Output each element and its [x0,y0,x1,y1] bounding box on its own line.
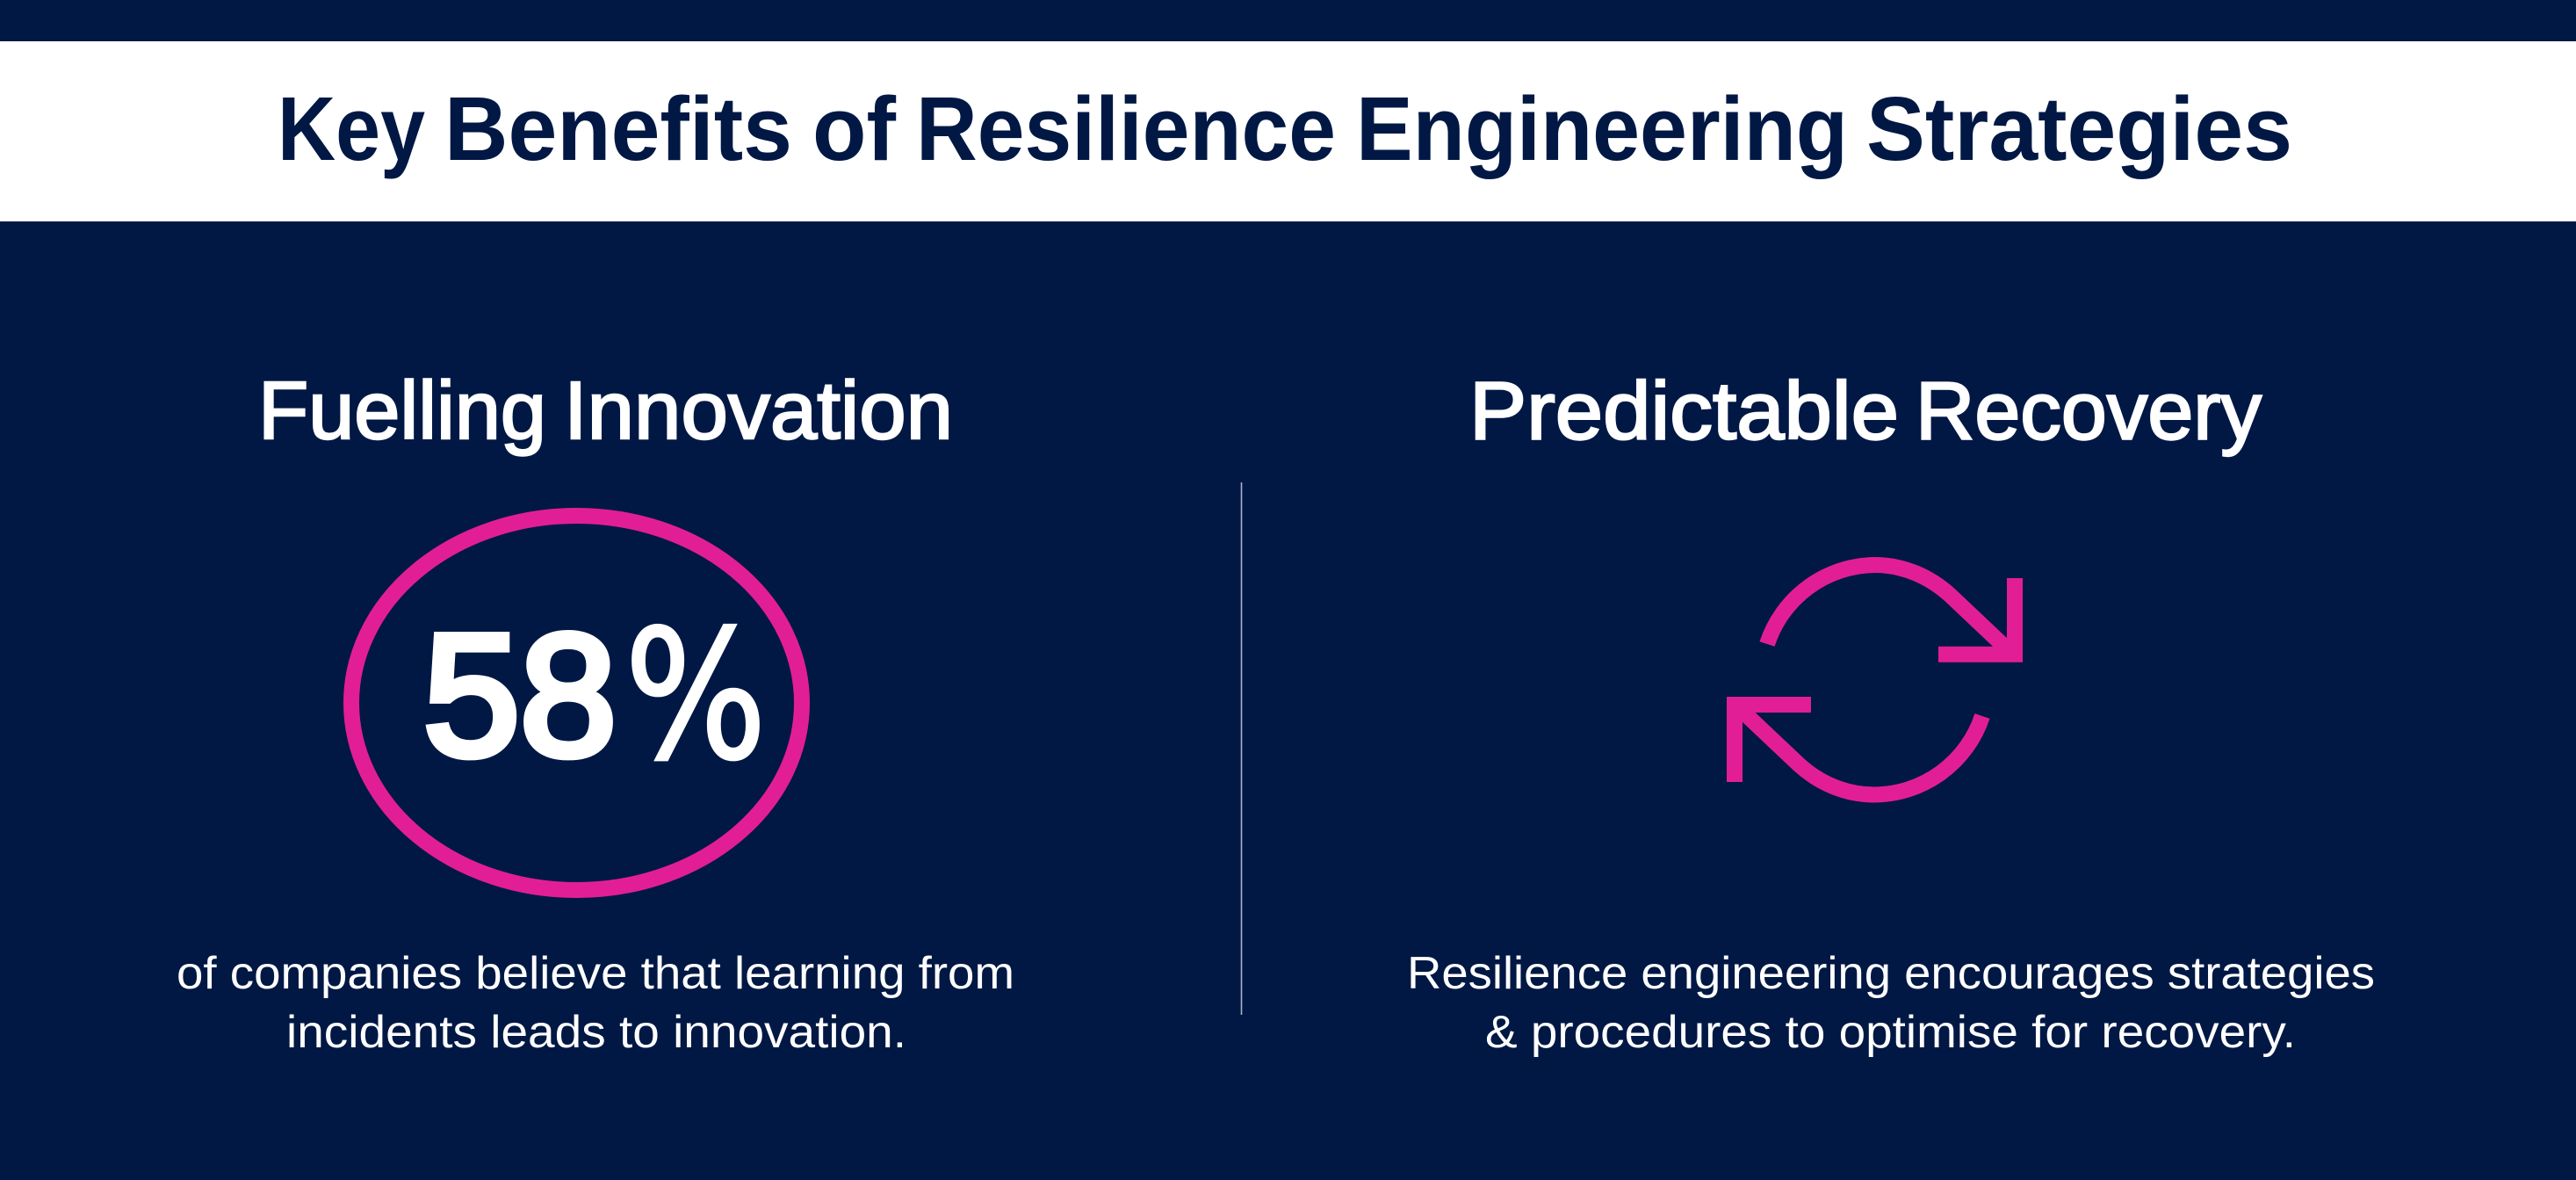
heading: predictable recovery: Recovery [1916,366,2262,457]
description: learning from incidents: incidents leads to innovation. [286,1007,906,1058]
title: Resilience [916,78,1336,179]
description: strategies for recovery [1407,948,2375,1058]
stat: 58 percent in ring: 58 [423,598,617,792]
heading: predictable recovery [1469,366,2262,457]
panel: fuelling innovation [177,365,1014,1058]
heading: fuelling innovation: Fuelling [258,365,546,456]
stat: 58 percent in ring [351,516,802,890]
divider [1241,482,1242,1015]
title: of [812,78,897,179]
panel: predictable recovery [1407,366,2375,1058]
heading: predictable recovery: Predictable [1469,366,1899,457]
title: Key [278,78,425,179]
title: Benefits [444,78,792,179]
description: learning from incidents: of companies believe that learning from [177,948,1014,999]
title banner [0,41,2576,221]
title: Strategies [1866,78,2292,179]
heading: fuelling innovation [258,365,953,456]
title: Engineering [1356,78,1848,179]
heading: fuelling innovation: Innovation [564,365,953,456]
icon: recovery cycle arrows [1735,565,2015,794]
description: learning from incidents [177,948,1014,1058]
description: strategies for recovery: Resilience engineering encourages strategies [1407,948,2375,999]
description: strategies for recovery: & procedures to optimise for recovery. [1485,1007,2296,1058]
stat: 58 percent in ring: % [624,592,767,800]
title [278,78,2292,179]
